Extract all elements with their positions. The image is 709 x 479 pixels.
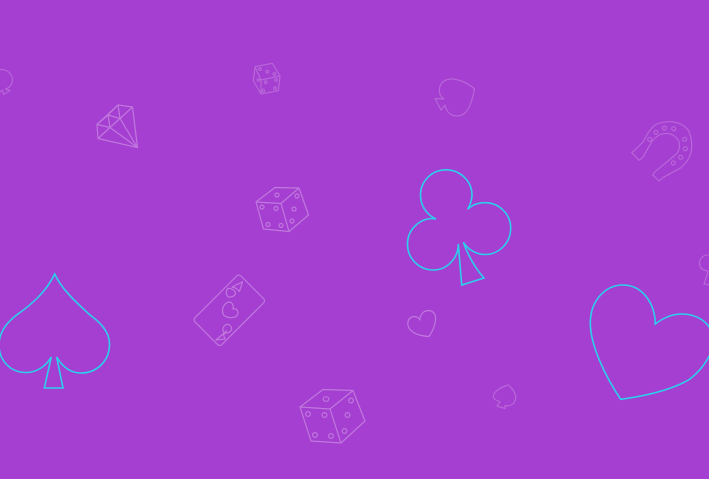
icon: diamond gem — [97, 105, 138, 148]
icon: small dice at top — [253, 63, 280, 94]
icon: small outline heart — [408, 310, 436, 336]
icon: large cyan club — [408, 170, 511, 285]
icon: large cyan heart — [590, 285, 709, 399]
icon: small outline spade — [493, 385, 516, 408]
icon: cropped club at right edge — [700, 255, 709, 285]
icon: horseshoe — [632, 122, 692, 181]
icon: cropped spade at left edge — [0, 69, 12, 94]
icon: large dice — [300, 390, 365, 443]
icon: medium dice — [256, 188, 308, 232]
icon: outline spade top centre — [435, 79, 474, 116]
icon: large cyan spade — [0, 274, 110, 388]
icon: playing card — [193, 274, 266, 347]
